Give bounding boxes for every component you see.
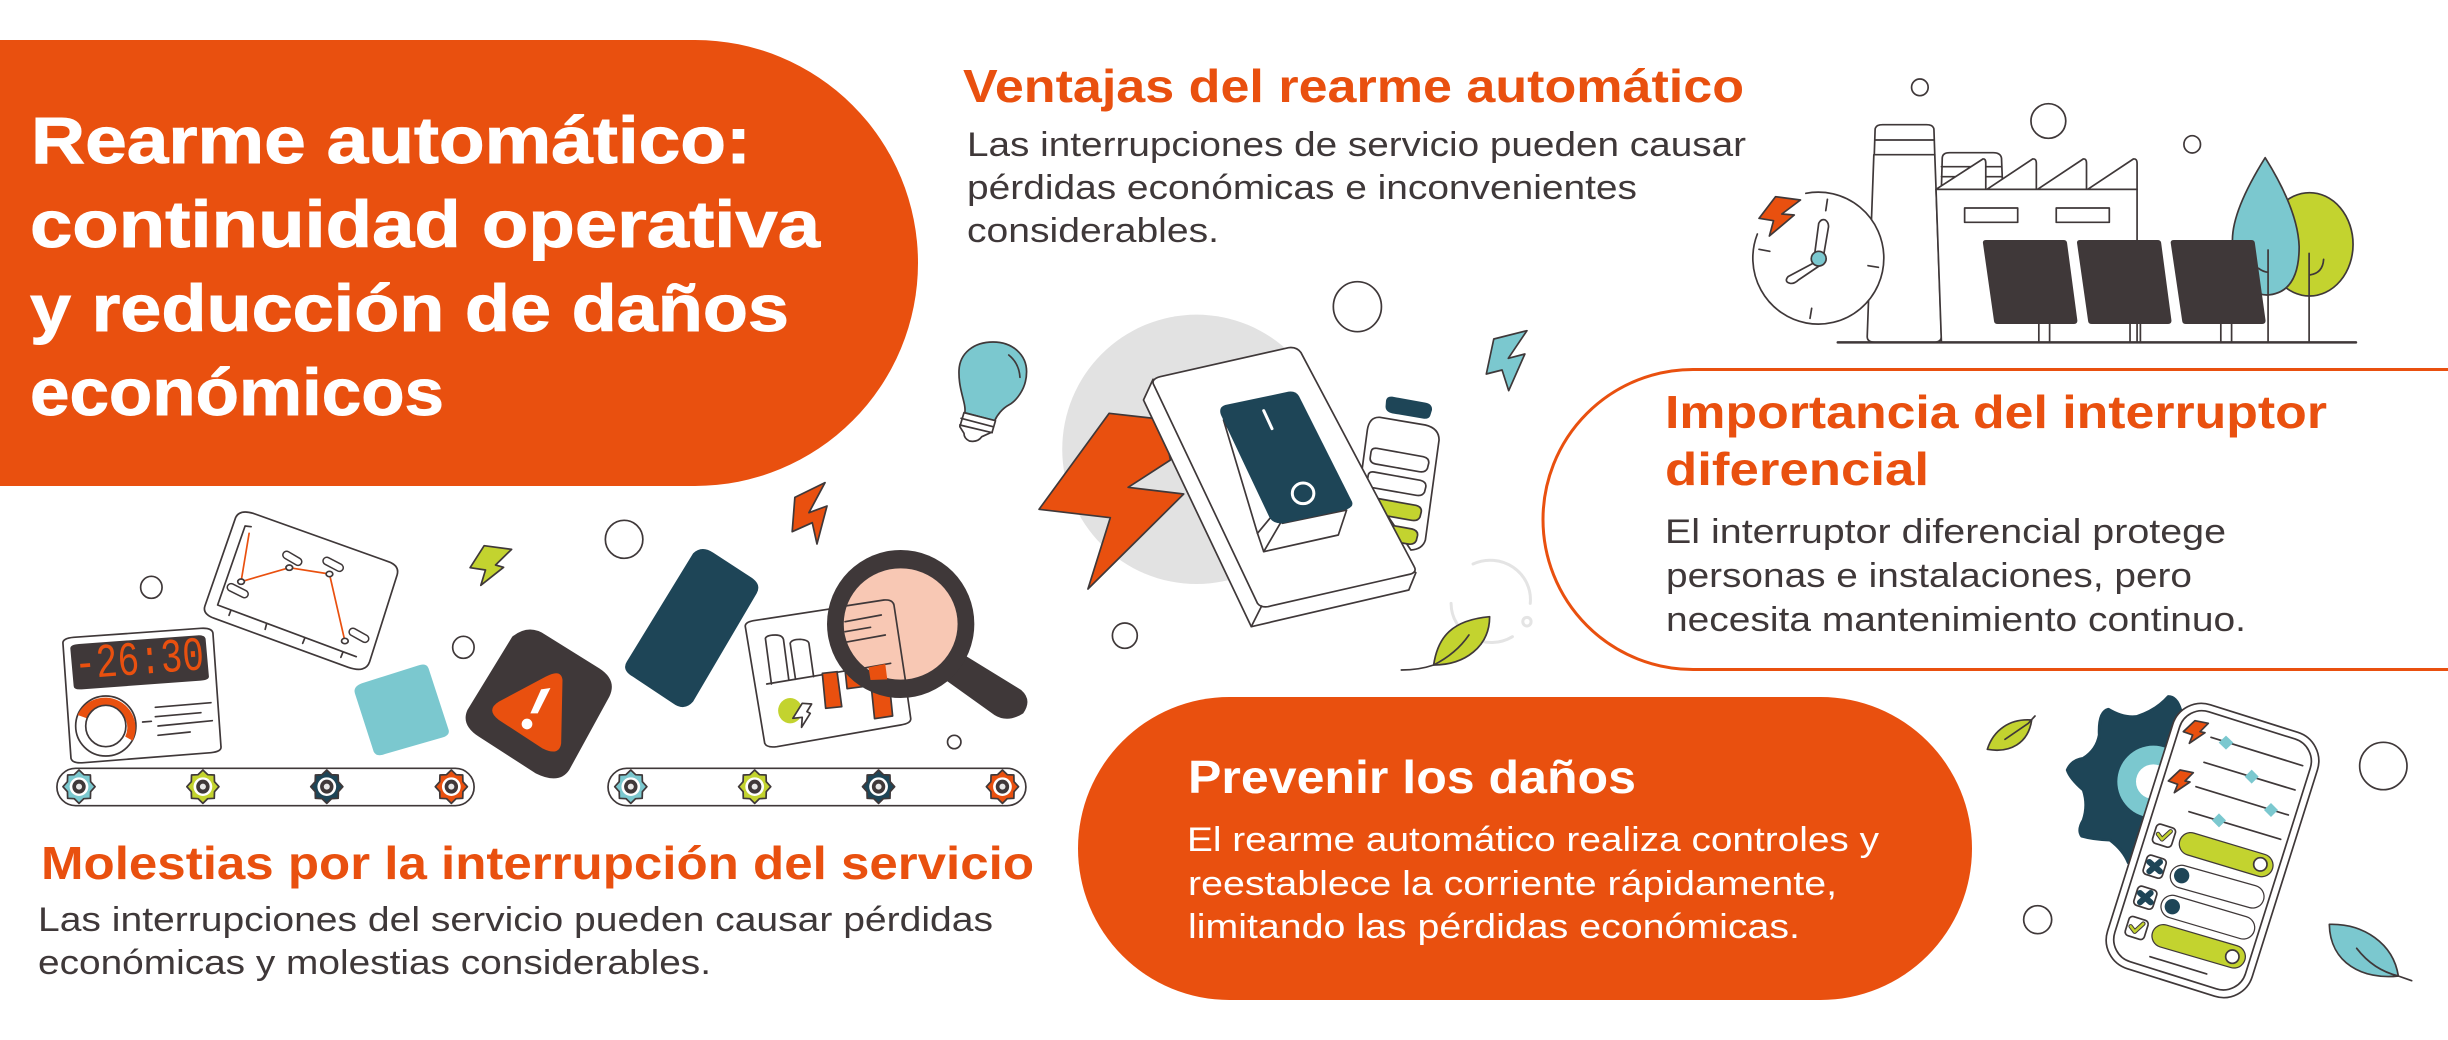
text block: molestias <box>38 901 993 982</box>
title <box>30 103 821 429</box>
icon: orange lightning bolt <box>792 483 827 544</box>
icon: light bulb <box>959 342 1027 441</box>
text block: importancia <box>1665 513 2246 639</box>
illustration: navy gear <box>2067 697 2193 863</box>
text block: prevenir: limitando las pérdidas económicas. <box>1188 908 1800 946</box>
panel: importancia del interruptor diferencial: diferencial <box>1665 443 1929 495</box>
illustration: conveyor belt right <box>608 768 1026 806</box>
icon: small green leaf <box>1987 716 2035 750</box>
text block: molestias: económicas y molestias considerables. <box>38 944 711 982</box>
shape: teal tile <box>355 664 449 755</box>
panel: prevenir los daños: Prevenir los daños <box>1188 751 1636 803</box>
decorative bubbles right <box>2024 742 2407 934</box>
title: continuidad operativa <box>30 187 821 261</box>
section: molestias por la interrupción del servicio: Molestias por la interrupción del servicio <box>41 837 1034 889</box>
title: y reducción de daños <box>30 271 789 345</box>
text block: prevenir: reestablece la corriente rápidamente, <box>1188 865 1837 903</box>
icon: teal leaf <box>2329 924 2412 981</box>
panel: prevenir los daños <box>1078 697 1972 1000</box>
illustration: conveyor belt left <box>57 768 474 806</box>
text block: ventajas: considerables. <box>967 212 1219 250</box>
icon: green leaf <box>1401 617 1490 670</box>
icon: warning sign <box>466 630 612 778</box>
text block: importancia: El interruptor diferencial protege <box>1665 513 2226 551</box>
text block: prevenir <box>1187 821 1880 946</box>
text block: ventajas <box>967 126 1746 250</box>
illustration: central switch with bolt and battery <box>1039 315 1439 627</box>
section: ventajas del rearme automático: Ventajas del rearme automático <box>963 60 1744 112</box>
illustration: factory with solar panels, clock and trees <box>1753 79 2356 342</box>
title: Rearme automático: <box>31 103 751 177</box>
text block: ventajas: Las interrupciones de servicio pueden causar <box>967 126 1746 164</box>
text block: ventajas: pérdidas económicas e inconvenientes <box>967 169 1637 207</box>
decorative bubbles left <box>141 520 961 749</box>
icon: teal lightning bolt <box>1486 331 1527 391</box>
shape: navy tilted panel <box>625 549 758 707</box>
section: molestias por la interrupción del servicio <box>38 837 1034 982</box>
illustration: digital timer panel <box>63 628 221 763</box>
decorative bubbles centre <box>1112 282 1531 648</box>
text block: importancia: personas e instalaciones, pero <box>1666 557 2192 595</box>
panel: title <box>0 40 918 486</box>
illustration: digital timer panel: -26:30 <box>72 630 206 694</box>
panel: importancia del interruptor diferencial: Importancia del interruptor <box>1665 386 2327 438</box>
icon: green lightning bolt <box>470 546 512 585</box>
illustration: report under magnifying glass <box>745 550 1027 747</box>
text block: prevenir: El rearme automático realiza controles y <box>1187 821 1880 859</box>
section: ventajas del rearme automático <box>963 60 1746 250</box>
illustration: line chart panel <box>204 512 398 669</box>
illustration: phone checklist <box>2099 696 2326 1005</box>
text block: importancia: necesita mantenimiento continuo. <box>1666 601 2246 639</box>
panel: importancia del interruptor diferencial <box>1543 370 2448 670</box>
title: económicos <box>30 355 444 429</box>
text block: molestias: Las interrupciones del servicio pueden causar pérdidas <box>38 901 993 939</box>
